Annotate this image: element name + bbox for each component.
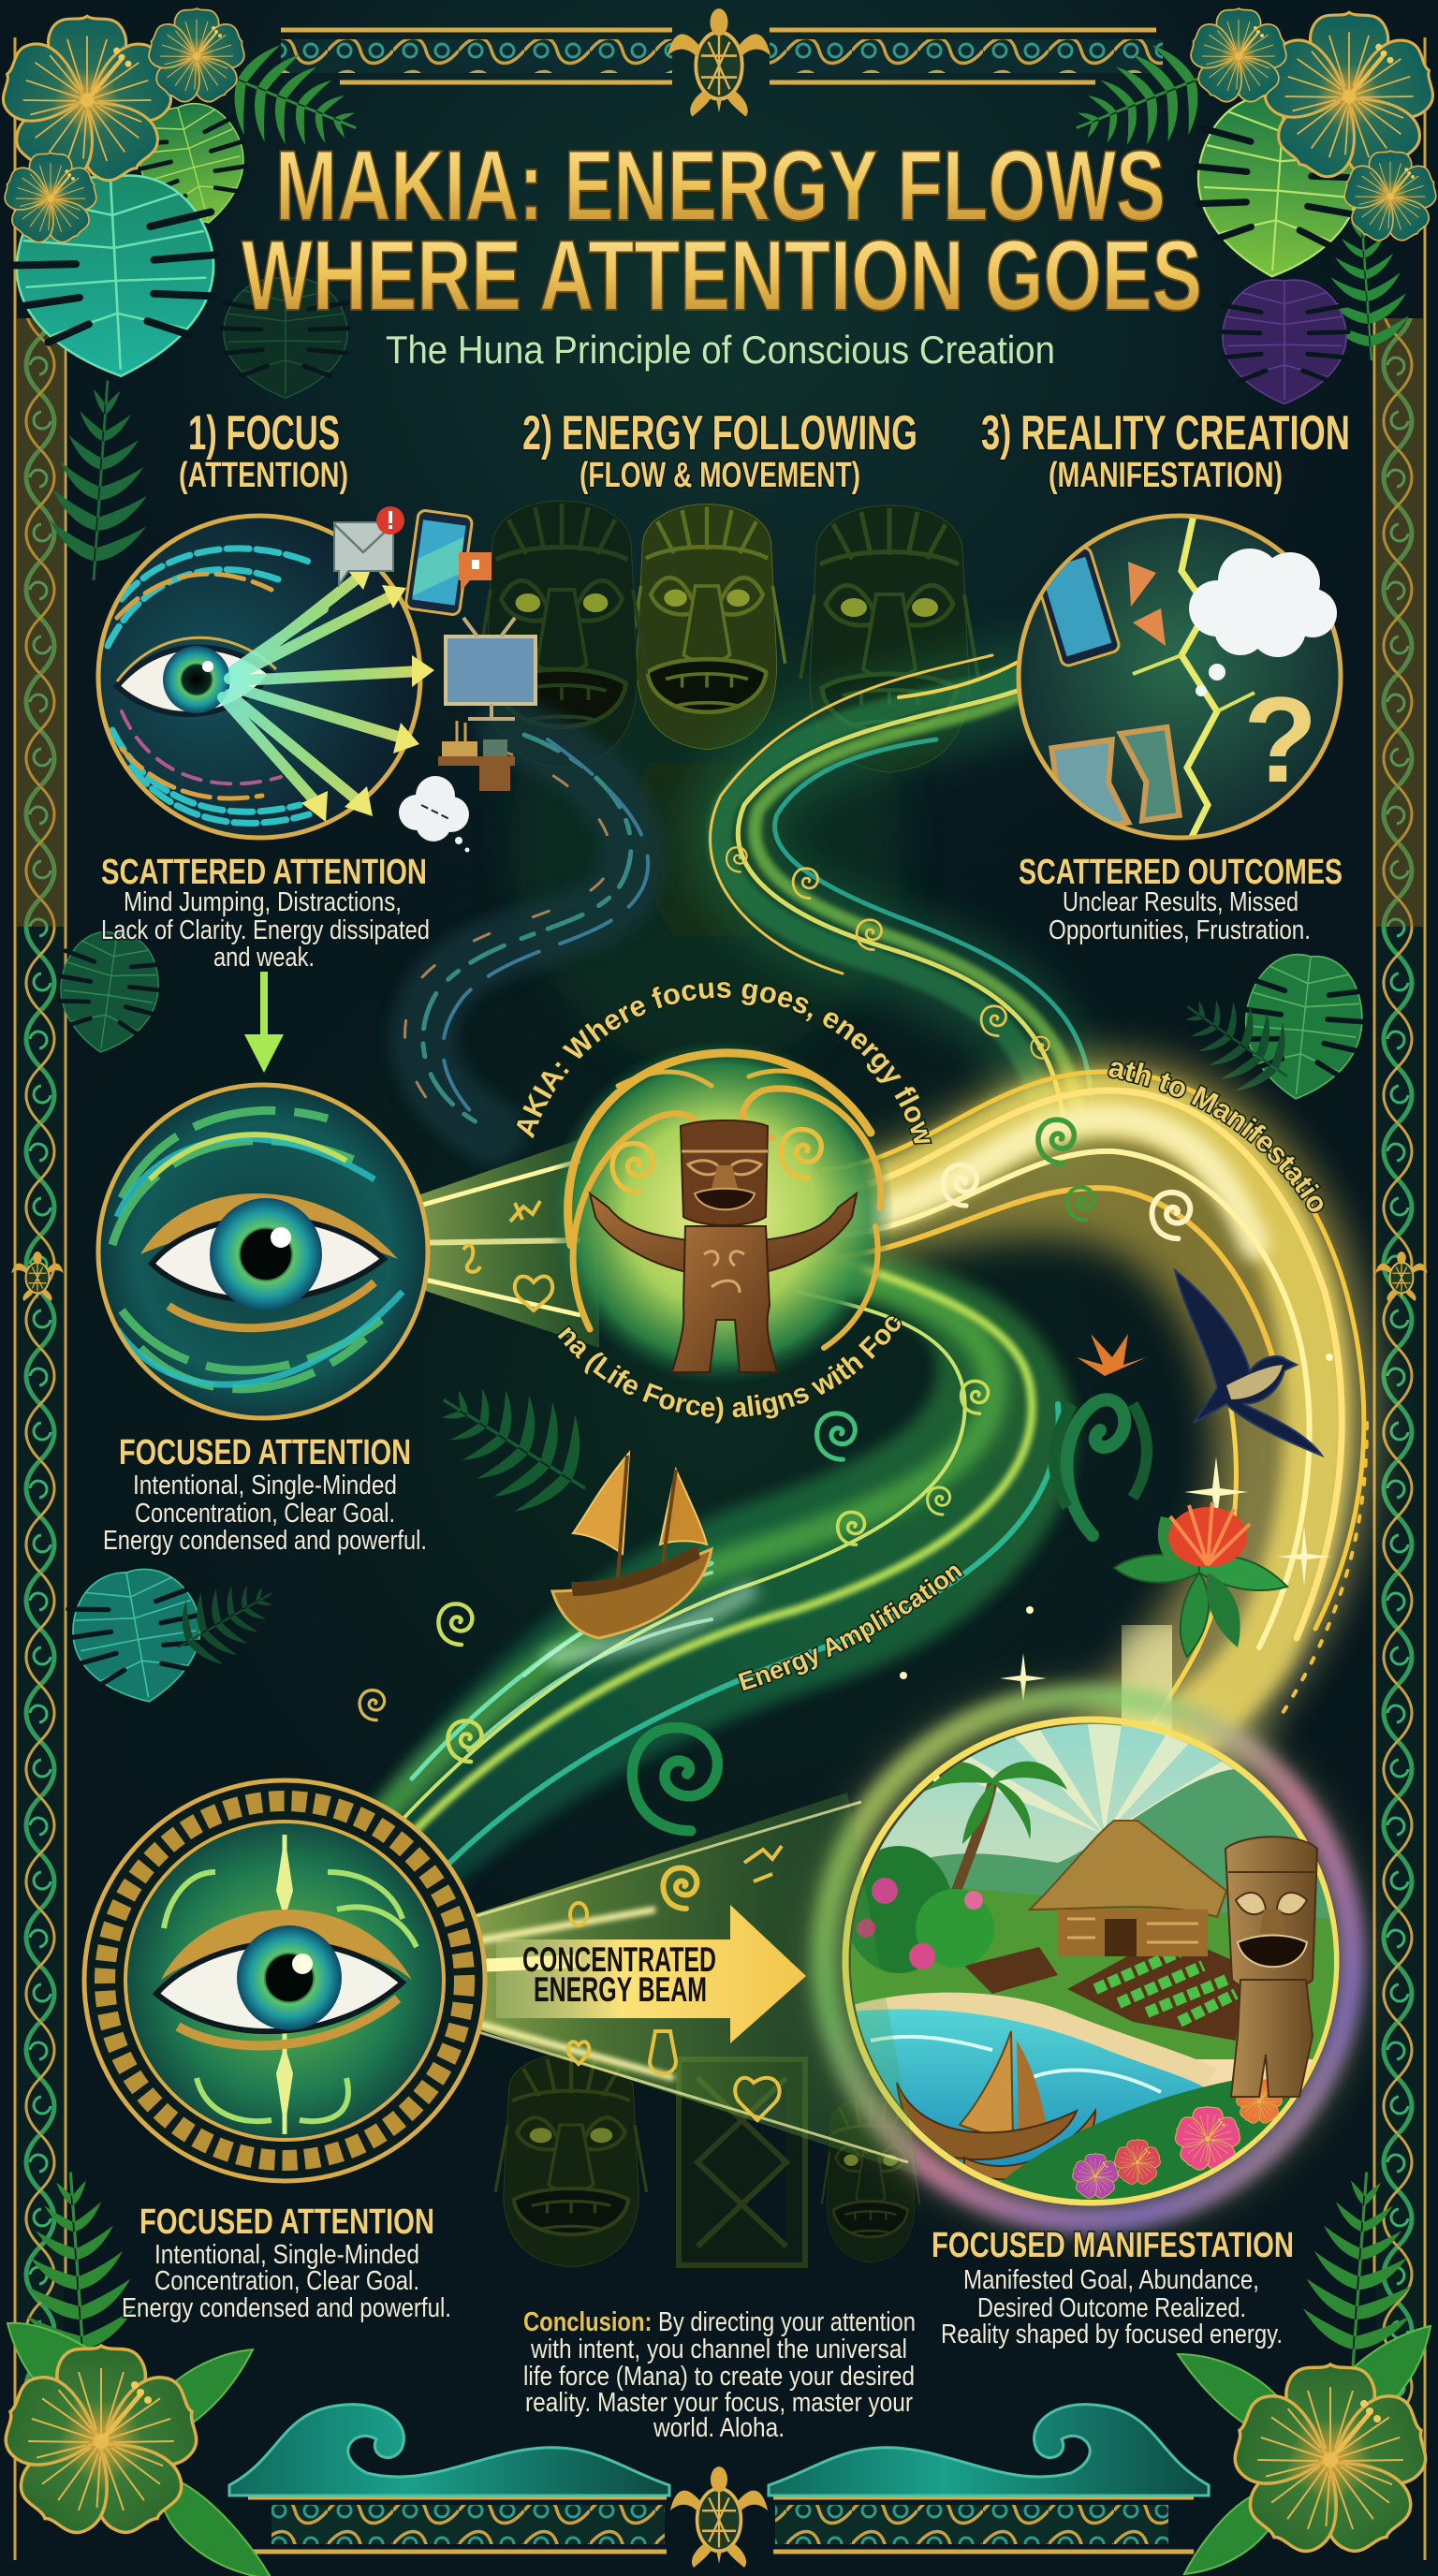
waves right	[769, 2405, 1209, 2496]
focused manifestation text: Manifested Goal, Abundance,	[963, 2265, 1259, 2295]
scattered attention text: Lack of Clarity. Energy dissipated	[101, 915, 430, 945]
spirals on golden flow	[943, 1120, 1190, 1238]
icon: flying bird	[1175, 1270, 1322, 1456]
icon: phone	[405, 509, 473, 616]
green-gold energy flow from reality creation	[711, 655, 1091, 1119]
concentrated energy beam arrow: ENERGY BEAM	[534, 1970, 707, 2009]
column heading 1	[179, 406, 348, 495]
mountains	[843, 1768, 1348, 1984]
scattered outcomes text	[1019, 853, 1343, 945]
subtitle: The Huna Principle of Conscious Creation	[386, 328, 1055, 372]
focused attention text 2: FOCUSED ATTENTION	[139, 2203, 434, 2242]
circle: focused eye 1	[98, 1085, 428, 1418]
mandala: mana center	[548, 1039, 894, 1385]
icon: hibiscus top-left	[0, 8, 249, 248]
beam: eye to tiki	[280, 1133, 599, 1348]
garden	[1067, 1949, 1240, 2041]
golden path to manifestation flow	[805, 1053, 1374, 1774]
scatter arrows	[223, 576, 421, 807]
column heading 3: (MANIFESTATION)	[1049, 456, 1283, 495]
icon: thought cloud	[399, 776, 470, 852]
column heading 2	[522, 406, 917, 495]
foliage: mid and lower side leaves	[51, 927, 1371, 1713]
scattered eye	[117, 637, 276, 714]
icon: hibiscus top-right	[1186, 8, 1438, 246]
rainbow halo	[807, 1681, 1369, 2235]
foliage: top-left corner	[9, 30, 374, 584]
icon: ohia lehua flower	[1114, 1502, 1287, 1657]
column heading 2: (FLOW & MOVEMENT)	[580, 456, 860, 495]
foliage: bottom left	[7, 2168, 271, 2576]
big dark green spiral	[632, 1728, 717, 1831]
conclusion text: life force (Mana) to create your desired	[523, 2362, 915, 2392]
curved label: energy amplification: Energy Amplification	[736, 1564, 964, 1692]
sea	[843, 2009, 1217, 2209]
outrigger canoe	[897, 2031, 1095, 2179]
scattered attention text	[101, 853, 430, 973]
focused manifestation text	[932, 2226, 1294, 2349]
side turtle left	[11, 1251, 64, 1301]
focused attention text 2: Intentional, Single-Minded	[154, 2240, 419, 2270]
sun rays	[947, 1724, 1247, 1833]
plant: bird of paradise and green koru	[1054, 1334, 1147, 1535]
waves left	[229, 2405, 669, 2496]
icon: sailing canoe	[552, 1453, 712, 1638]
icon: desk	[438, 721, 515, 791]
concentrated energy beam arrow	[496, 1905, 806, 2043]
beam rays	[309, 1802, 908, 2162]
icon: bottom turtle	[670, 2466, 768, 2568]
side turtle right	[1375, 1251, 1428, 1301]
concentrated energy beam arrow: CONCENTRATED	[522, 1940, 716, 1979]
circular label: mana: Mana (Life Force) aligns with Focus	[556, 1315, 902, 1425]
spirals on green flow	[438, 1381, 989, 1762]
bottom border band	[248, 2497, 1194, 2552]
palm tree	[922, 1762, 1067, 1900]
sand	[855, 1992, 1217, 2087]
foliage: top-right corner	[1058, 30, 1412, 403]
circle: scattered outcomes	[1019, 515, 1341, 842]
beam rays	[286, 1161, 580, 1315]
tiki statue	[590, 1120, 857, 1372]
beam glyphs	[463, 1201, 552, 1310]
focused attention text 1: Energy condensed and powerful.	[103, 1526, 427, 1556]
conclusion text: reality. Master your focus, master your	[525, 2388, 913, 2418]
column heading 3	[981, 406, 1350, 495]
background tiki carvings: top	[477, 501, 978, 1067]
icon: envelope	[334, 506, 404, 585]
foreground flowers	[974, 2078, 1339, 2209]
background tiki carvings: bottom	[495, 2054, 919, 2267]
icon: broken phone	[1041, 547, 1120, 666]
icon: chat bubble	[459, 552, 492, 592]
spirals on upper flow	[726, 847, 1049, 1059]
icon: lightning crack	[1181, 515, 1217, 842]
scattered attention text: SCATTERED ATTENTION	[101, 853, 427, 892]
jungle foliage left	[844, 1846, 994, 1973]
focused attention text 1	[103, 1433, 427, 1556]
scattered outcomes text: SCATTERED OUTCOMES	[1019, 853, 1343, 892]
focused attention text 2: Concentration, Clear Goal.	[154, 2266, 419, 2296]
dark scattered flow	[405, 730, 648, 1133]
focused attention text 1: Concentration, Clear Goal.	[135, 1499, 395, 1529]
circle: scattered attention	[98, 516, 434, 838]
ground	[843, 1885, 1348, 2059]
concentrated beam	[302, 1793, 919, 2176]
focused attention text 2: Energy condensed and powerful.	[122, 2293, 451, 2323]
sparkles	[900, 1129, 1333, 1782]
foliage: bottom right	[1178, 2168, 1431, 2574]
curved label: path to manifestation: Path to Manifestation	[1107, 1060, 1324, 1213]
focused attention text 1: FOCUSED ATTENTION	[119, 1433, 411, 1472]
circle: ornate focused eye	[84, 1780, 485, 2181]
down arrow	[244, 972, 284, 1073]
title	[242, 129, 1202, 331]
icon: television	[446, 618, 536, 719]
manifestation tiki statue	[1225, 1837, 1317, 2097]
scattered attention text: Mind Jumping, Distractions,	[124, 887, 402, 917]
beam glyphs	[568, 1846, 782, 2120]
conclusion text: Conclusion: By directing your attention	[523, 2307, 916, 2337]
focused attention text 2	[122, 2203, 451, 2323]
outer border: left panel	[15, 37, 66, 2560]
conclusion text	[523, 2307, 916, 2443]
conclusion text: with intent, you channel the universal	[530, 2334, 907, 2364]
icon: top turtle	[668, 8, 770, 117]
focused eye 1 lids and iris	[140, 1193, 398, 1328]
outer border: right panel	[1374, 37, 1425, 2560]
ornate eye iris and lids	[156, 1910, 412, 2045]
icon: white thought cloud	[1189, 549, 1337, 696]
column heading 2: 2) ENERGY FOLLOWING	[522, 406, 917, 461]
hut	[1030, 1821, 1226, 1956]
conclusion text: world. Aloha.	[653, 2413, 785, 2443]
icon: hibiscus bottom-right	[1225, 2364, 1435, 2563]
column heading 1: 1) FOCUS	[188, 406, 340, 461]
scattered outcomes text: Unclear Results, Missed	[1063, 887, 1299, 917]
small gold glyph	[360, 1690, 385, 1720]
focused manifestation text: Desired Outcome Realized.	[977, 2293, 1246, 2323]
distraction icons	[334, 506, 536, 852]
focused attention text 1: Intentional, Single-Minded	[133, 1471, 397, 1500]
scattered attention text: and weak.	[213, 943, 315, 973]
icon: question mark: ?	[1243, 671, 1317, 808]
column heading 1: (ATTENTION)	[179, 456, 348, 495]
manifestation scene	[843, 1713, 1348, 2209]
icon: orange shards	[1128, 562, 1166, 646]
icon: broken picture	[1051, 727, 1180, 831]
arrow heads	[301, 564, 434, 822]
scattered outcomes text: Opportunities, Frustration.	[1049, 915, 1311, 945]
icon: hibiscus bottom-left	[0, 2346, 206, 2544]
focused manifestation text: FOCUSED MANIFESTATION	[932, 2226, 1294, 2265]
green energy amplification flow	[346, 1226, 1076, 1914]
focused manifestation text: Reality shaped by focused energy.	[941, 2320, 1283, 2349]
top border band	[281, 30, 1163, 82]
